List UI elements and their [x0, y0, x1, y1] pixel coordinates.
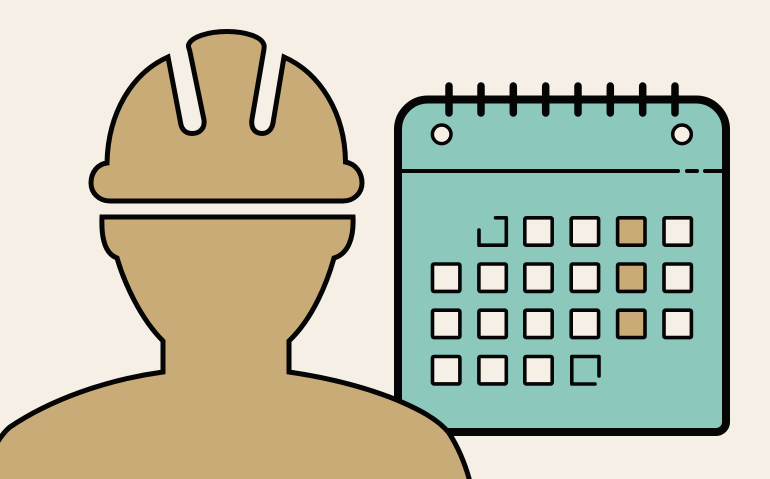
row 3 days: [432, 310, 691, 338]
head, neck and shoulders: [0, 217, 470, 479]
calendar body: [398, 100, 726, 432]
icon: wall calendar: [398, 86, 726, 432]
partial last day: [572, 356, 599, 384]
row 2 days: [432, 264, 691, 291]
row 1 days: [525, 218, 691, 245]
calendar day grid: [432, 218, 691, 384]
calendar header line: [402, 169, 722, 173]
partial first day: [479, 218, 506, 245]
icon: worker silhouette: [0, 32, 470, 479]
calendar hanging holes: [432, 125, 691, 144]
hard hat: [91, 32, 362, 201]
row 4 days: [432, 356, 552, 384]
calendar spiral rings: [449, 86, 675, 113]
